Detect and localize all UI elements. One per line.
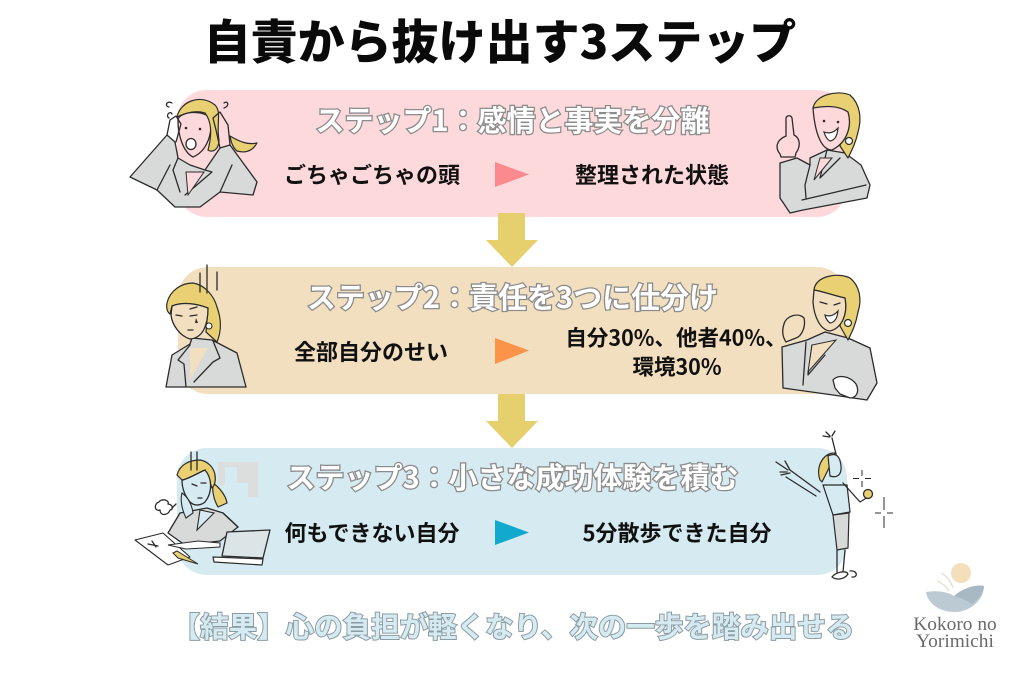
panel: step 1: [130, 90, 870, 217]
title: 自責から抜け出す3ステップ: [204, 4, 796, 73]
step 1 triangle arrow: [495, 162, 529, 187]
icon: smiling woman pointing up: [777, 93, 870, 213]
step 1 before text: ごちゃごちゃの頭: [284, 158, 460, 190]
step 3 after text: 5分散歩できた自分: [583, 516, 771, 548]
icon: woman stretching arms with sparkles: [776, 431, 893, 579]
step 2 after text: [565, 322, 787, 382]
step 2 before text: 全部自分のせい: [294, 335, 448, 367]
logo bowl shade: [954, 586, 984, 604]
arrow: step 2 to step 3: [486, 394, 538, 448]
step 1 background: [177, 90, 847, 217]
step 2 background: [178, 267, 847, 394]
panel: step 3: [135, 431, 893, 579]
logo bowl: [926, 586, 984, 612]
step 2 after text: 自分30%、他者40%、: [565, 322, 787, 352]
icon: exhausted woman at laptop: [135, 452, 270, 565]
step 1 heading: ステップ1：感情と事実を分離: [315, 98, 710, 140]
step 1 after text: 整理された状態: [575, 158, 729, 190]
step 3 heading: ステップ3：小さな成功体験を積む: [286, 455, 739, 497]
logo name: [913, 614, 997, 652]
result text: 【結果】心の負担が軽くなり、次の一歩を踏み出せる: [172, 605, 854, 646]
arrow: step 1 to step 2: [486, 213, 538, 267]
logo name: Yorimichi: [916, 631, 994, 652]
logo sun: [951, 563, 971, 583]
step 3 before text: 何もできない自分: [284, 516, 460, 548]
panel: step 2: [166, 265, 877, 400]
logo name: Kokoro no: [913, 614, 997, 635]
step 3 triangle arrow: [495, 520, 529, 545]
icon: dejected woman: [166, 265, 246, 387]
step 2 heading: ステップ2：責任を3つに仕分け: [307, 275, 718, 317]
step 2 triangle arrow: [495, 338, 529, 364]
step 2 after text: 環境30%: [632, 350, 722, 382]
logo: Kokoro no Yorimichi: [913, 563, 997, 652]
logo wave lines: [937, 573, 953, 591]
step 3 background: [177, 448, 847, 575]
icon: confident woman with raised fist: [782, 275, 877, 400]
icon: troubled woman holding head: [130, 99, 257, 207]
